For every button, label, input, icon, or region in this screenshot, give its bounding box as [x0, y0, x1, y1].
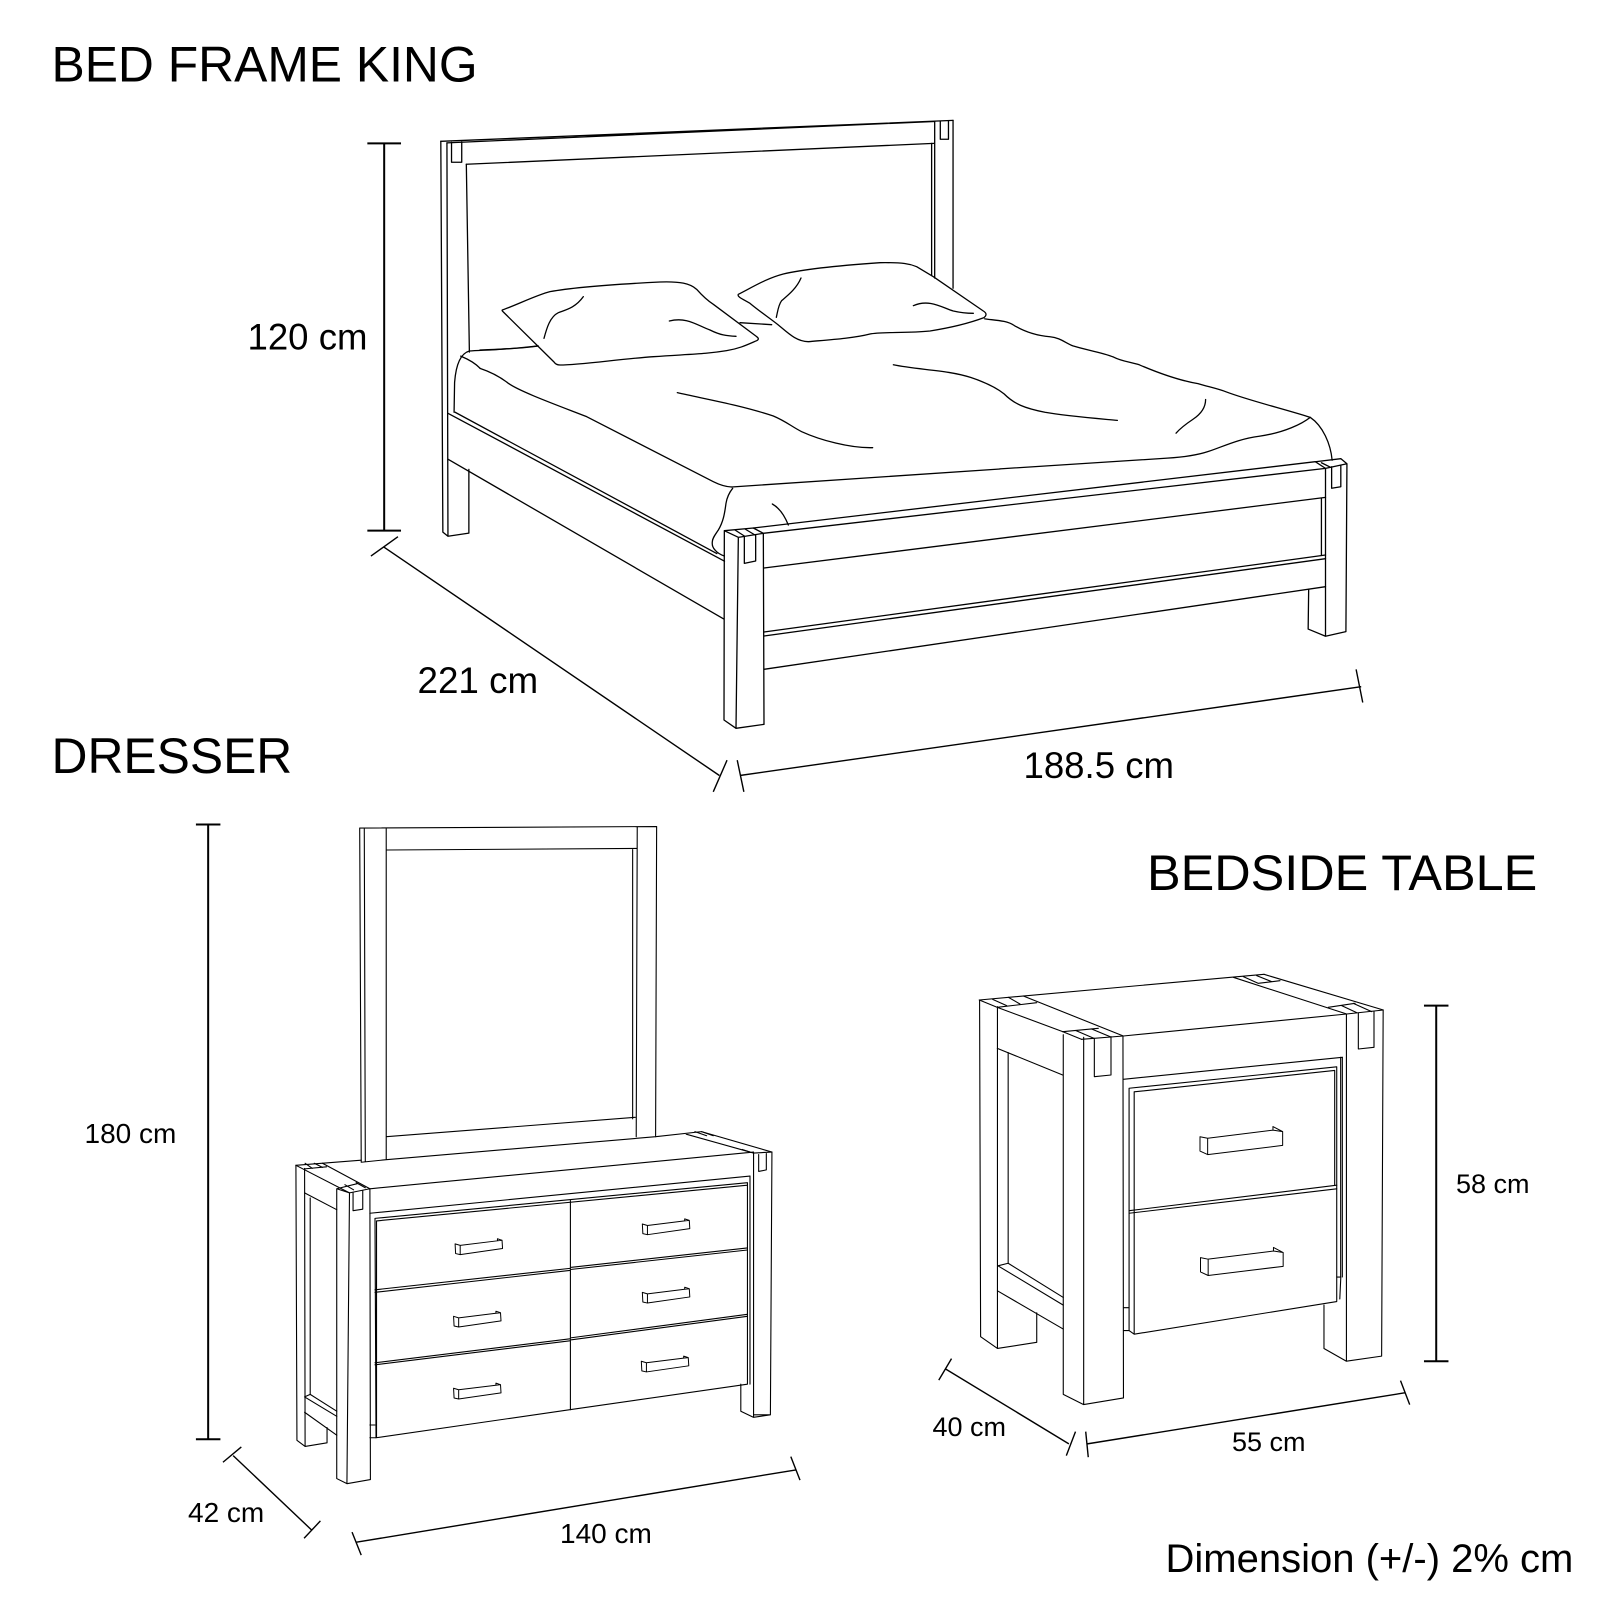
side rail [448, 412, 724, 619]
mattress left side [480, 323, 873, 487]
bed width dimension [737, 669, 1363, 792]
dresser width dimension [352, 1457, 800, 1555]
label: 180 cm: 180 cm [84, 1118, 176, 1149]
bedside table illustration [979, 974, 1383, 1405]
title: bed frame king: BED FRAME KING [52, 36, 478, 92]
note: dimension tolerance: Dimension (+/-) 2% cm [1166, 1537, 1573, 1581]
bedside height dimension [1424, 1006, 1448, 1361]
label: 42 cm: 42 cm [188, 1497, 264, 1528]
title: dresser: DRESSER [52, 728, 292, 784]
label: 55 cm: 55 cm [1232, 1427, 1306, 1457]
right foot post [1308, 459, 1347, 636]
bedside handle: bottom [1201, 1247, 1283, 1276]
dresser height dimension [196, 824, 220, 1439]
title: bedside table: BEDSIDE TABLE [1147, 844, 1537, 901]
bedside top rails [979, 974, 1347, 1079]
mirror [360, 827, 657, 1162]
dresser handle: middle left [454, 1311, 501, 1327]
bedside top left [979, 996, 1123, 1077]
label: 140 cm: 140 cm [560, 1518, 652, 1549]
mattress front edge [732, 469, 1000, 487]
bed frame illustration [441, 120, 1347, 728]
bedside drawers [1123, 1067, 1337, 1334]
bedside top right [1233, 974, 1383, 1277]
dresser handle: top left [455, 1239, 503, 1255]
bed length dimension [371, 537, 727, 792]
dresser carcass [296, 1132, 772, 1484]
mattress back corner [454, 346, 538, 412]
bed height dimension [367, 143, 401, 531]
pillows [502, 263, 986, 365]
label: 120 cm: 120 cm [248, 316, 367, 358]
dresser handle: bottom left [454, 1383, 501, 1399]
footboard rails [753, 462, 1326, 669]
label: 221 cm: 221 cm [418, 660, 538, 701]
bedside legs and lower rails [980, 1000, 1383, 1405]
dresser with mirror illustration [296, 827, 772, 1484]
headboard [441, 120, 953, 536]
dresser drawers [370, 1176, 750, 1438]
dresser handle: bottom right [641, 1356, 689, 1372]
mattress right side and wrinkles [893, 319, 1332, 469]
bedside width dimension [1086, 1381, 1410, 1457]
label: 40 cm: 40 cm [932, 1412, 1006, 1442]
dresser handle: top right [642, 1219, 690, 1235]
bedside depth dimension [939, 1359, 1076, 1456]
bedside handle: top [1200, 1127, 1283, 1155]
label: 58 cm: 58 cm [1456, 1169, 1530, 1199]
dresser handle: middle right [642, 1287, 690, 1303]
foot post with blanket drape [712, 488, 788, 728]
dresser depth dimension [223, 1447, 320, 1538]
label: 188.5 cm: 188.5 cm [1024, 745, 1174, 786]
